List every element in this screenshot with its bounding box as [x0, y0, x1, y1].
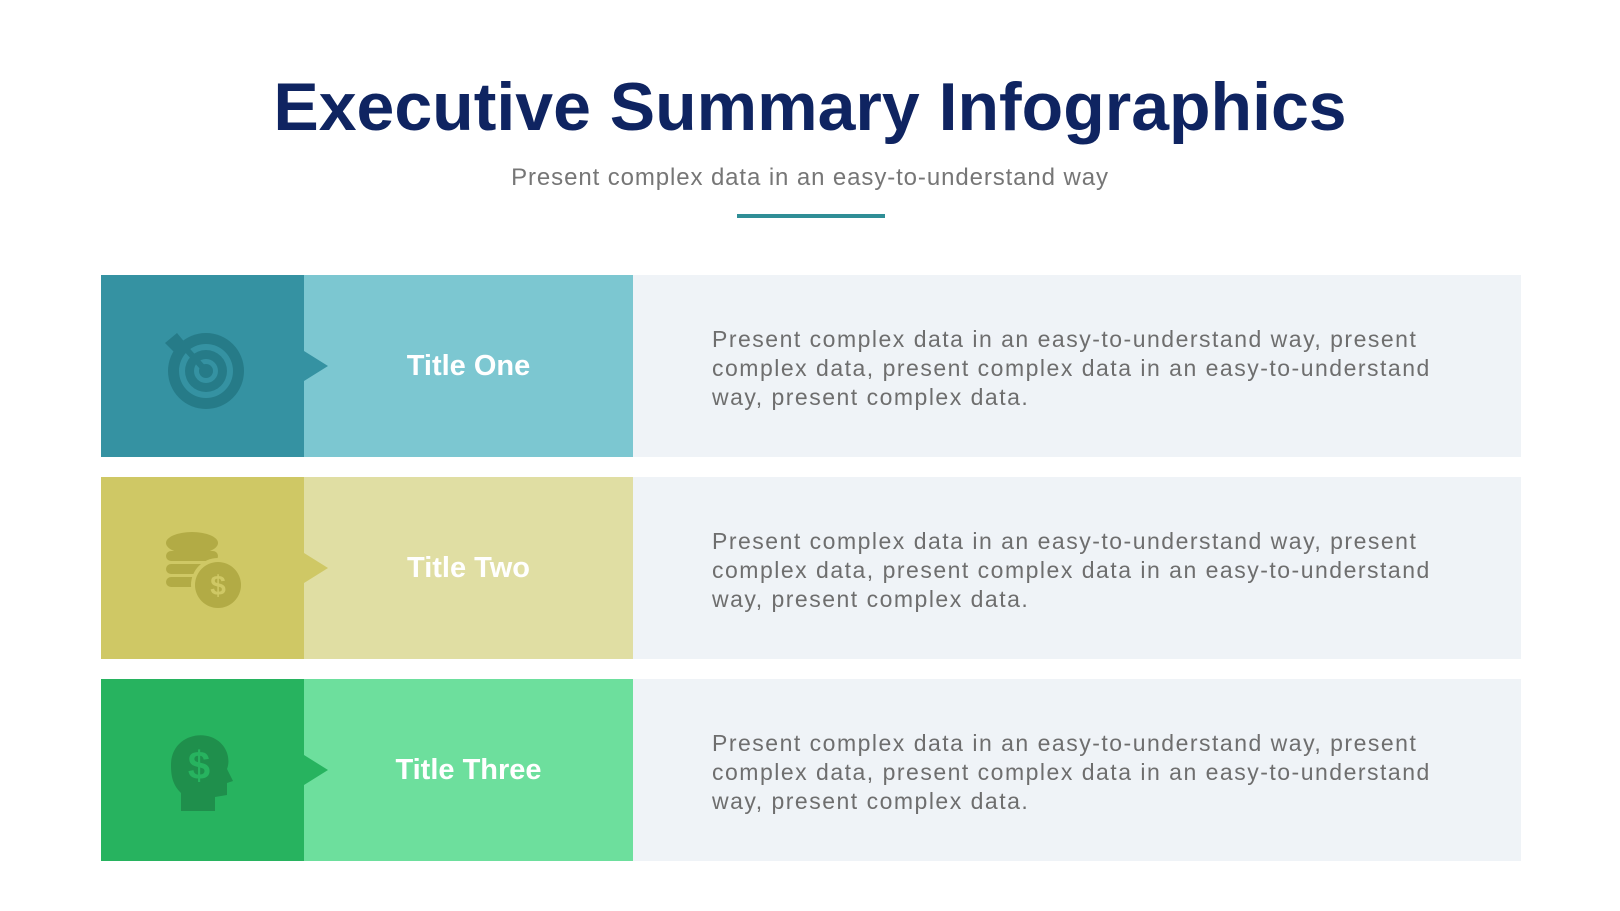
row: Title Two [101, 477, 1521, 659]
text block: way, present complex data. [712, 586, 1029, 612]
text block: Present complex data in an easy-to-understand way, present [712, 326, 1417, 352]
text block: complex data, present complex data in an easy-to-understand [712, 557, 1431, 583]
subtitle: Present complex data in an easy-to-understand way [511, 164, 1109, 191]
label: Title Two [407, 552, 530, 584]
label [304, 275, 633, 457]
row: Title Three [101, 679, 1521, 861]
text block: Present complex data in an easy-to-understand way, present [712, 528, 1417, 554]
text block: complex data, present complex data in an easy-to-understand [712, 355, 1431, 381]
icon: coins: $ [210, 570, 226, 601]
text block: way, present complex data. [712, 788, 1029, 814]
icon: target [165, 333, 244, 409]
icon: head with dollar: $ [188, 744, 210, 788]
text block: complex data, present complex data in an easy-to-understand [712, 759, 1431, 785]
label [304, 477, 633, 659]
icon: coins [166, 532, 241, 608]
text block [633, 679, 1521, 861]
label: Title One [407, 350, 530, 382]
arrow [304, 351, 328, 381]
arrow [304, 553, 328, 583]
text block: Present complex data in an easy-to-understand way, present [712, 730, 1417, 756]
icon: head with dollar [171, 735, 233, 811]
text block [633, 275, 1521, 457]
title: Executive Summary Infographics [273, 69, 1347, 145]
text block [633, 477, 1521, 659]
arrow [304, 755, 328, 785]
underline [737, 214, 885, 218]
label [304, 679, 633, 861]
row: Title One [101, 275, 1521, 457]
text block: way, present complex data. [712, 384, 1029, 410]
label: Title Three [395, 754, 542, 786]
